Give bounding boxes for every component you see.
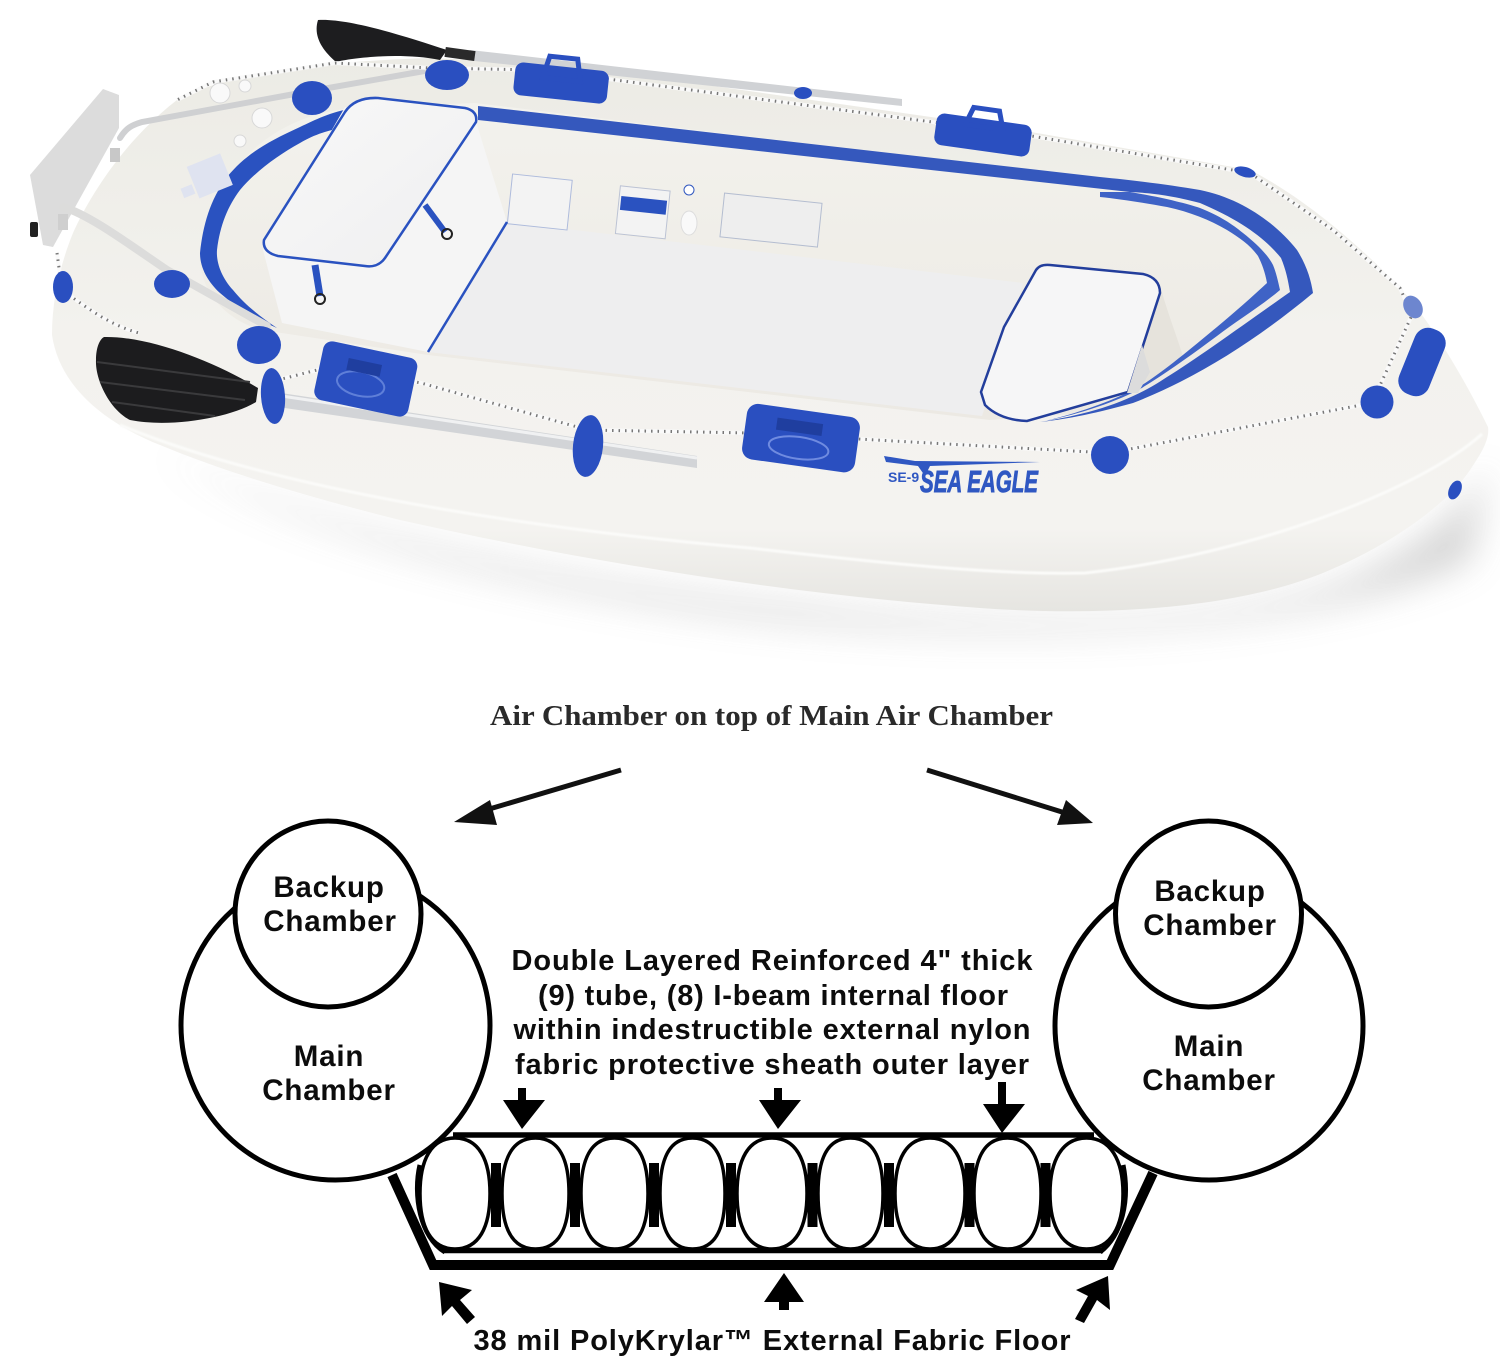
- right main label: Chamber: [1142, 1064, 1276, 1097]
- bow interior shade: [1135, 286, 1184, 392]
- up arrows: [439, 1273, 1110, 1324]
- nine floor tubes: [420, 1138, 1123, 1249]
- floor description: fabric protective sheath outer layer: [515, 1049, 1029, 1081]
- diagram caption: Air Chamber on top of Main Air Chamber: [490, 700, 1053, 732]
- patch: near middle: [741, 402, 861, 474]
- floor description: within indestructible external nylon: [512, 1014, 1030, 1046]
- patch: far right: [933, 103, 1034, 158]
- hull: [52, 58, 1488, 611]
- wall labels: [507, 174, 822, 247]
- outer tube wrap curves: [417, 1165, 1125, 1252]
- floor description: Double Layered Reinforced 4" thick: [512, 945, 1033, 977]
- fabric floor label: 38 mil PolyKrylar™ External Fabric Floor: [474, 1325, 1070, 1357]
- skeg: [1445, 478, 1465, 502]
- inflated floor: [392, 1135, 1153, 1265]
- ring: bow: [1360, 386, 1394, 418]
- down arrows: [503, 1082, 1025, 1133]
- arrow: caption to right chamber: [927, 770, 1093, 825]
- right backup label: Backup: [1154, 875, 1266, 908]
- ring: rear side: [154, 270, 190, 298]
- left blue arc: [200, 108, 354, 328]
- outer fabric floor: [392, 1173, 1153, 1265]
- left backup label: Backup: [273, 871, 385, 904]
- floor description: [512, 945, 1033, 1081]
- left main chamber: [181, 871, 490, 1180]
- ring: front: [1091, 436, 1129, 474]
- left backup chamber: [235, 821, 421, 1007]
- motor mount plate: [30, 89, 120, 247]
- arrow: center: [764, 1273, 804, 1310]
- right chamber group: [1055, 821, 1363, 1180]
- floor top and bottom lines: [443, 1135, 1103, 1250]
- left main label: Chamber: [262, 1074, 396, 1107]
- arrow: right: [1075, 1276, 1110, 1323]
- Sea Eagle logo: SE-9: [888, 469, 919, 485]
- far oar: [317, 20, 902, 106]
- right backup chamber: [1116, 821, 1302, 1007]
- oar clip: near mid: [570, 414, 606, 478]
- I-beams between tubes: [496, 1163, 1046, 1227]
- right backup label: Chamber: [1143, 909, 1277, 942]
- floor description: (9) tube, (8) I-beam internal floor: [538, 980, 1008, 1012]
- small seat: [981, 265, 1160, 421]
- ring: bow upper: [1399, 292, 1427, 322]
- left chamber group: [181, 821, 490, 1180]
- patch: near left: [313, 340, 419, 418]
- ring: far small: [794, 87, 812, 99]
- stern instruction text: [174, 153, 233, 204]
- fittings: patches and D-rings: [53, 53, 1465, 502]
- ring: far bow: [1233, 164, 1257, 180]
- inner blue stripe: [1045, 192, 1280, 421]
- patch: bow: [1394, 324, 1450, 400]
- ropes: [57, 63, 1412, 453]
- left backup label: Chamber: [263, 905, 397, 938]
- interior well: [200, 103, 1313, 420]
- patch: far left: [513, 53, 611, 104]
- main blue stripe: [478, 106, 1313, 422]
- ring: stern top: [292, 81, 332, 115]
- right main chamber: [1055, 872, 1363, 1180]
- floor: [428, 222, 1023, 416]
- ground shadow: [160, 450, 1490, 632]
- arrow: caption to left chamber: [454, 770, 621, 825]
- right main label: Main: [1174, 1030, 1244, 1063]
- hull lower seam: [120, 425, 1482, 573]
- ring: stern side: [53, 271, 73, 303]
- inflation valves: [210, 80, 272, 147]
- large seat: [263, 98, 507, 352]
- boat photo illustration: [30, 20, 1490, 632]
- motor mount tubes: [63, 70, 430, 326]
- Sea Eagle logo: [884, 456, 1040, 499]
- arrow: left: [439, 1282, 475, 1324]
- ring: oar lock far: [425, 60, 469, 90]
- Sea Eagle logo: SEA EAGLE: [920, 464, 1039, 499]
- near oar: [96, 337, 697, 468]
- left main label: Main: [294, 1040, 364, 1073]
- oar clip: near oar: [259, 367, 287, 425]
- ring: rear corner: [237, 326, 281, 364]
